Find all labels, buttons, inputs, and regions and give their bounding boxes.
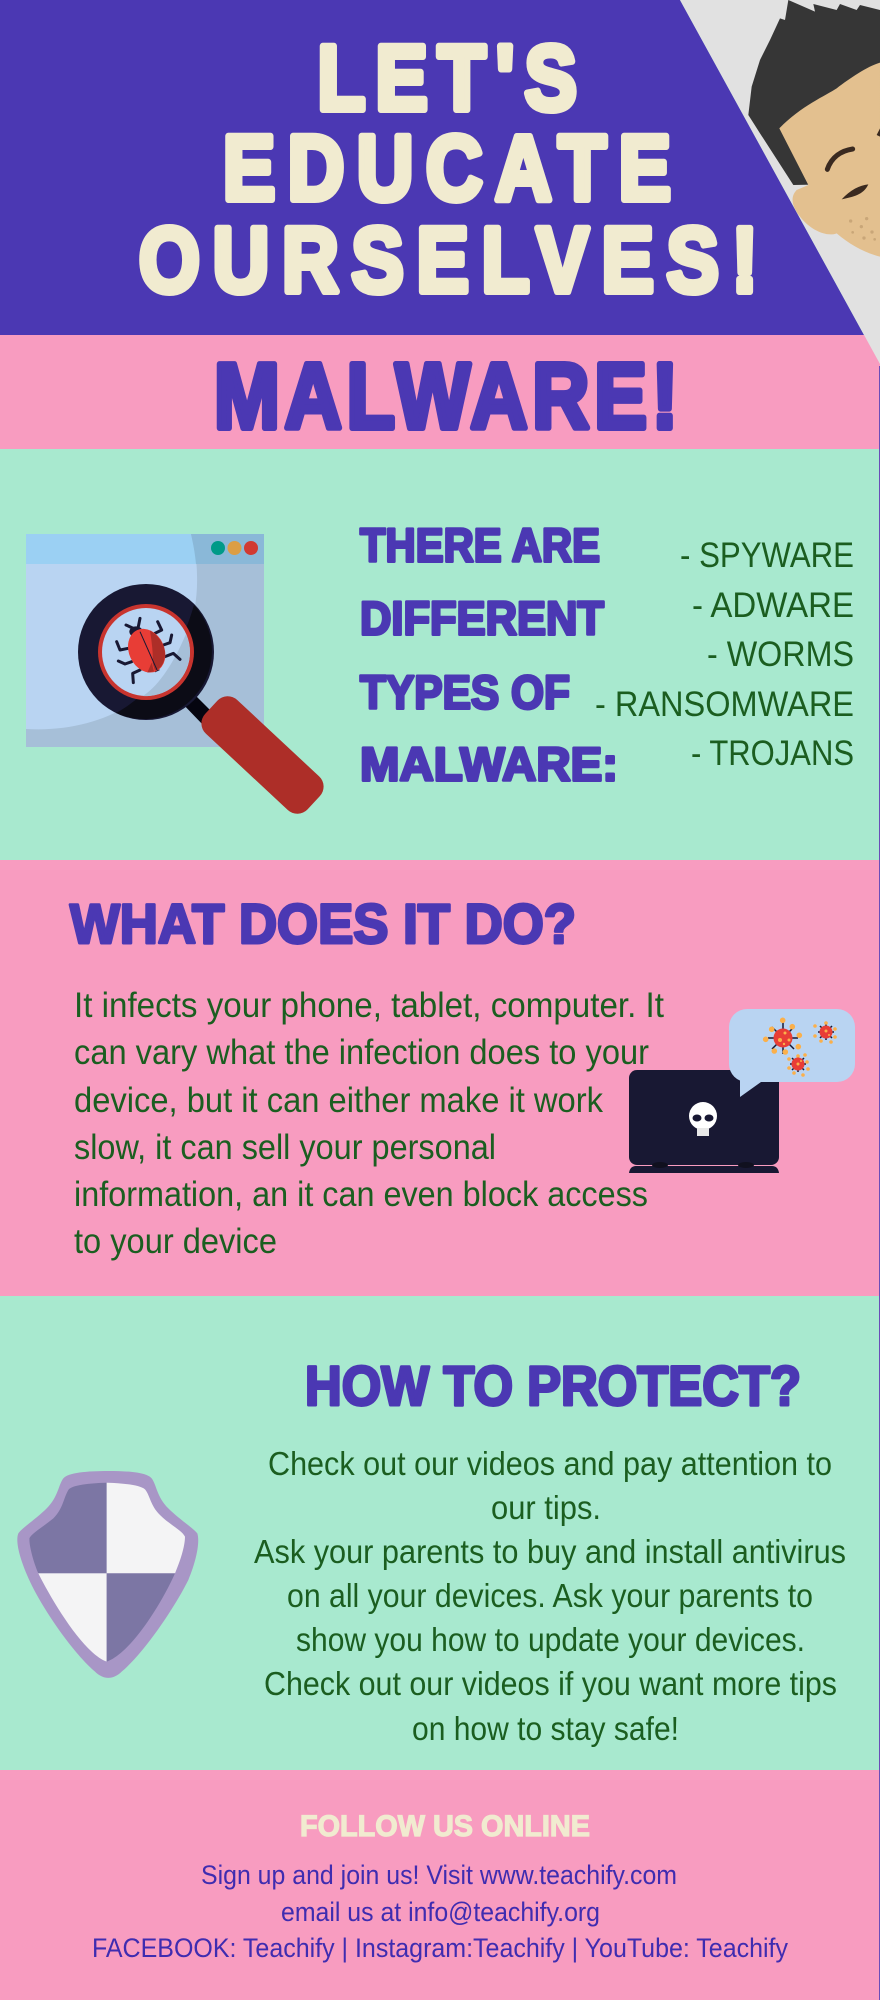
paragraph: what malware does: to your device (74, 1222, 277, 1261)
paragraph: what malware does (74, 986, 664, 1261)
title: OURSELVES! (139, 210, 758, 312)
paragraph: what malware does: information, an it can even block access (74, 1175, 648, 1214)
heading: there are different types of malware: TYPES OF (360, 666, 570, 718)
title (139, 28, 758, 312)
panel: how to protect (17, 1364, 845, 1747)
list of malware types: - ADWARE (692, 586, 854, 625)
paragraph: what malware does: slow, it can sell your personal (74, 1128, 496, 1167)
paragraph: what malware does: It infects your phone, tablet, computer. It (74, 986, 664, 1025)
list of malware types: - WORMS (707, 635, 854, 674)
list of malware types: - RANSOMWARE (595, 685, 854, 724)
icon: browser window with magnifier and bug (26, 534, 329, 820)
icon: infected laptop with virus speech bubble (629, 1009, 855, 1173)
list of malware types: - TROJANS (691, 734, 854, 773)
icon: bug (117, 618, 180, 683)
list of malware types (595, 536, 854, 773)
list of malware types: - SPYWARE (680, 536, 854, 575)
paragraph: protection tips (254, 1445, 846, 1747)
panel: title header (0, 0, 864, 335)
title: LET'S (318, 28, 577, 130)
heading: there are different types of malware: THERE ARE (360, 518, 600, 572)
paragraph: protection tips: show you how to update your devices. (296, 1621, 805, 1658)
contact details: Sign up and join us! Visit www.teachify.com (201, 1860, 677, 1890)
heading: there are different types of malware (360, 518, 618, 790)
paragraph: what malware does: device, but it can either make it work (74, 1081, 603, 1120)
paragraph: protection tips: our tips. (491, 1489, 601, 1526)
panel: malware banner (0, 335, 880, 449)
contact details (92, 1860, 788, 1963)
heading: what does it do: WHAT DOES IT DO? (70, 892, 576, 955)
paragraph: protection tips: on all your devices. Ask your parents to (287, 1577, 813, 1614)
heading: malware: MALWARE! (214, 345, 678, 448)
paragraph: protection tips: Check out our videos and pay attention to (268, 1445, 832, 1482)
title: EDUCATE (223, 118, 671, 220)
heading: there are different types of malware: DIFFERENT (360, 592, 604, 644)
heading: how to protect: HOW TO PROTECT? (305, 1354, 801, 1417)
paragraph: what malware does: can vary what the infection does to your (74, 1033, 649, 1072)
paragraph: protection tips: Ask your parents to buy and install antivirus (254, 1533, 846, 1570)
contact details: email us at info@teachify.org (281, 1897, 600, 1927)
panel: what does it do (0, 860, 880, 1296)
contact details: FACEBOOK: Teachify | Instagram:Teachify | YouTube: Teachify (92, 1933, 788, 1963)
heading: there are different types of malware: MALWARE: (360, 738, 618, 790)
paragraph: protection tips: on how to stay safe! (412, 1710, 679, 1747)
icon: shield (17, 1471, 198, 1678)
heading: follow us online: FOLLOW US ONLINE (300, 1810, 590, 1843)
illustration: cartoon face in corner (680, 0, 880, 364)
panel: footer (0, 1770, 880, 2000)
paragraph: protection tips: Check out our videos if you want more tips (264, 1665, 837, 1702)
panel: types of malware (0, 449, 880, 860)
